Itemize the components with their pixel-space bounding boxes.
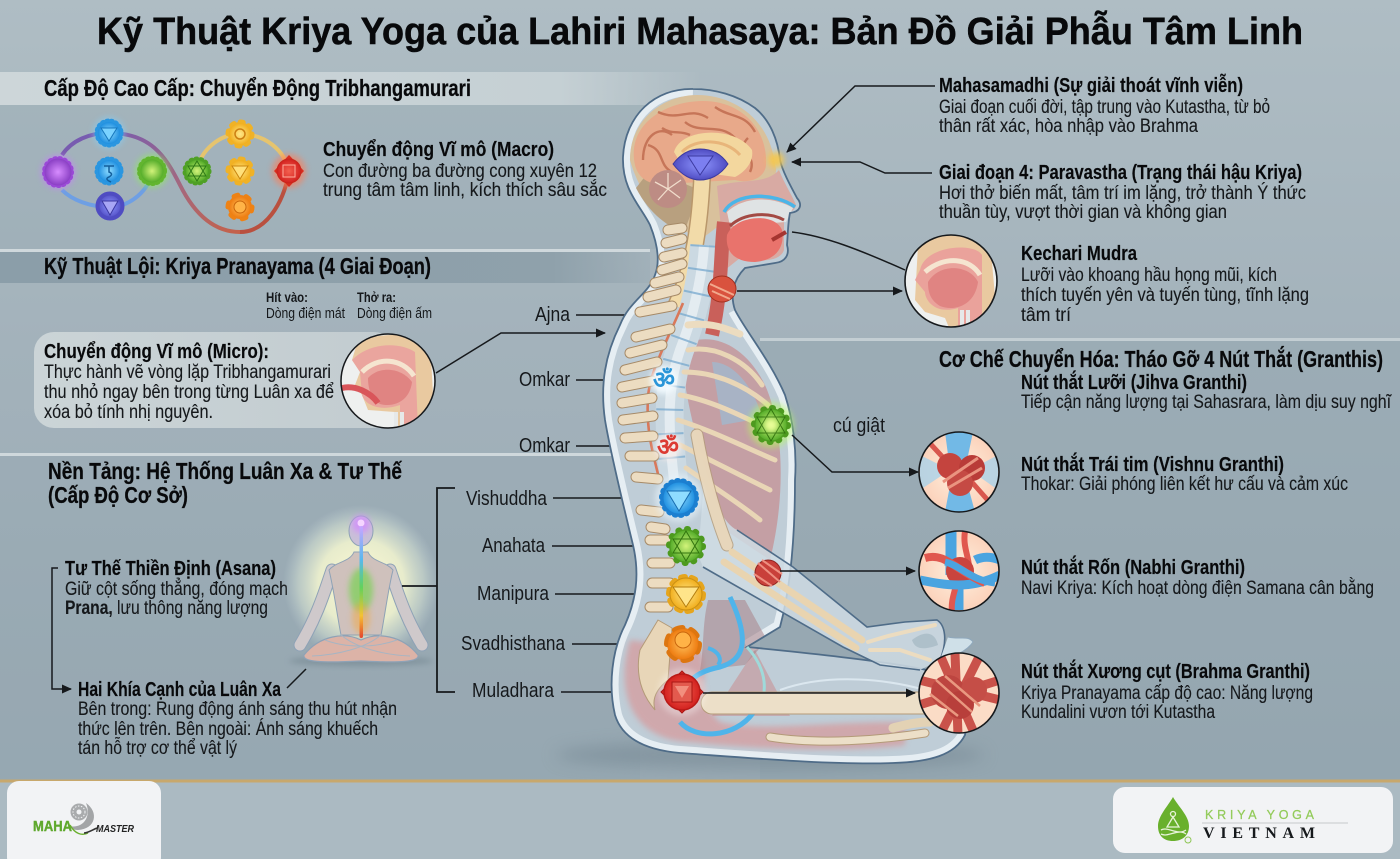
logo: Maha Master: MAHA [33,818,72,835]
text: kechari mudra: thích tuyến yên và tuyến tùng, tĩnh lặng [1021,285,1309,306]
panel: granthis [833,345,1392,735]
text: nabhi granthi: Nút thắt Rốn (Nabhi Granthi) [1021,555,1245,579]
arms [300,570,332,645]
chakra: Anahata upper green [748,402,794,448]
energy channels [680,597,925,734]
cerebellum [649,170,687,208]
arrow: to forehead mahasamadhi [787,86,935,152]
legend: inhale: Dòng điện mát [266,306,345,322]
throat [712,222,724,335]
ribs [678,349,775,520]
text: two aspects: Bên trong: Rung động ánh sáng thu hút nhận [78,699,397,720]
panel: advanced level [0,72,700,232]
throat knot [708,276,736,302]
heading: foundation: (Cấp Độ Cơ Sở) [48,482,188,508]
text: jihva granthi: Nút thắt Lưỡi (Jihva Granthi) [1021,370,1247,394]
line: lips to kechari inset [792,232,905,270]
chakra: Ajna [673,149,728,180]
chakra: Omkar blue: ॐ [653,366,675,394]
callout: micro movement [34,332,394,428]
arm [697,435,973,670]
label: jolt: cú giật [833,415,885,437]
logo: Kriya Yoga Vietnam [1113,787,1393,853]
label: Muladhara: Muladhara [472,680,555,702]
arrow: throat knot to kechari inset [737,290,902,292]
text: nabhi granthi [1021,555,1374,599]
logo: Kriya Yoga Vietnam: VIETNAM [1203,825,1315,842]
label: Omkar upper: Omkar [519,369,570,391]
text: two aspects: thức lên trên. Bên ngoài: Ánh sáng khuếch [78,719,378,740]
logo: Maha Master [7,781,161,859]
text: jihva granthi [1021,370,1392,413]
icon: nabhi knot [919,531,1000,612]
label: Svadhisthana: Svadhisthana [461,633,566,655]
icon: throat cross-section inset [341,334,435,432]
pineal glow [768,152,784,168]
panel: foundation [48,458,455,759]
text: mahasamadhi [939,73,1270,137]
abdomen column [700,600,767,670]
text: asana: Giữ cột sống thẳng, đóng mạch [65,578,288,600]
chakra: Omkar red: ॐ [657,433,679,461]
label: Vishuddha: Vishuddha [466,488,548,510]
chakra: Vishuddha [655,474,703,522]
sacrum [638,620,672,710]
panel: kriya pranayama [0,252,650,432]
legend: inhale: Hít vào: [266,290,308,305]
pelvis and leg muscle [625,640,905,749]
leg bones [712,703,930,741]
title: Kỹ Thuật Kriya Yoga của Lahiri Mahasaya: Bản Đồ Giải Phẫu Tâm Linh [97,9,1303,53]
vertebrae [622,228,682,607]
text: two aspects [78,678,397,759]
text: asana: Tư Thế Thiền Định (Asana) [65,557,276,580]
heading: advanced level: Cấp Độ Cao Cấp: Chuyển Động Tribhangamurari [44,75,471,101]
callout: micro movement: Chuyển động Vĩ mô (Micro): [44,340,269,363]
text: kechari mudra [1021,242,1309,326]
chest muscle [682,339,781,560]
collarbone [688,324,740,334]
text: paravastha: Hơi thở biến mất, tâm trí im lặng, trở thành Ý thức [939,183,1306,204]
logo: Maha Master: MASTER [96,824,135,835]
text: paravastha: Giai đoạn 4: Paravastha (Trạng thái hậu Kriya) [939,161,1302,184]
icon: kechari inset [905,235,998,330]
text: vishnu granthi [1021,452,1348,495]
callout: micro movement: xóa bỏ tính nhị nguyên. [44,402,213,423]
torso [329,552,393,635]
arrow: muladhara to inset [703,692,915,694]
legend: exhale: Dòng điện ấm [357,306,432,322]
text: mahasamadhi: thân rất xác, hòa nhập vào Brahma [939,116,1198,137]
callout: micro movement: Thực hành vẽ vòng lặp Tribhangamurari [44,362,331,383]
nasal cavity and face interior [717,170,796,270]
skull ring [630,95,776,240]
chakra: Svadhisthana [667,628,699,660]
spinal cord [676,178,702,306]
arrow: micro inset to body [436,333,605,373]
chakra labels [461,304,693,702]
text: brahma granthi [1021,659,1313,723]
text: macro movement: Con đường ba đường cong xuyên 12 [323,161,597,182]
label: Ajna: Ajna [535,304,571,326]
forearm knot [754,560,782,586]
arrow: to forehead paravastha [792,162,932,173]
bracket arrow: asana to chakra aspects [52,568,71,689]
inner glass rim [603,89,965,763]
text: two aspects: Hai Khía Cạnh của Luân Xa [78,678,281,701]
bracket: chakra list [402,488,455,692]
icon: brahma knot [919,653,1000,735]
text: macro movement: Chuyển động Vĩ mô (Macro) [323,138,554,161]
body outline [603,89,966,763]
chakra: Anahata [669,529,703,563]
chakra: Muladhara [658,668,706,716]
legend: inhale [266,290,345,322]
label: Omkar lower: Omkar [519,435,570,457]
heading: foundation [48,458,402,508]
anatomical body figure [555,89,985,769]
label: Anahata: Anahata [482,535,546,557]
mouth and tongue [724,196,795,262]
text: brahma granthi: Kundalini vươn tới Kutastha [1021,702,1215,723]
brain [634,101,784,208]
label: Omkar upper [519,369,652,391]
crossed legs [304,636,418,662]
callout: micro movement: thu nhỏ ngay bên trong từng Luân xa để [44,382,334,403]
text: brahma granthi: Kriya Pranayama cấp độ cao: Năng lượng [1021,683,1313,704]
icon: vishnu knot [919,432,999,512]
logo: Kriya Yoga Vietnam: KRIYA YOGA [1205,808,1315,822]
text: kechari mudra: Kechari Mudra [1021,242,1137,265]
label: Manipura: Manipura [477,583,550,605]
spine column [648,245,704,482]
text: kechari mudra: Lưỡi vào khoang hầu họng mũi, kích [1021,265,1277,286]
text: kechari mudra: tâm trí [1021,305,1072,326]
label: Omkar lower [519,435,657,457]
chakra path diagram [41,117,306,232]
heading: kriya pranayama: Kỹ Thuật Lội: Kriya Pranayama (4 Giai Đoạn) [44,253,431,279]
heading: foundation: Nền Tảng: Hệ Thống Luân Xa & Tư Thế [48,458,402,484]
text: macro movement [323,138,607,201]
text: asana [65,557,288,619]
icon: seated meditator [283,505,439,666]
legend: exhale [357,290,432,322]
text: paravastha [939,161,1306,223]
text: mahasamadhi: Mahasamadhi (Sự giải thoát vĩnh viễn) [939,73,1243,97]
footer [0,780,1400,859]
text: two aspects: tán hỗ trợ cơ thể vật lý [78,737,237,759]
chakra: Manipura [669,577,703,611]
text: mahasamadhi: Giai đoạn cuối đời, tập trung vào Kutastha, từ bỏ [939,97,1270,118]
arrow: forearm knot to inset [780,570,915,572]
text: paravastha: thuần tùy, vượt thời gian và không gian [939,202,1227,223]
head [349,516,373,546]
text: brahma granthi: Nút thắt Xương cụt (Brahma Granthi) [1021,659,1310,683]
text: macro movement: trung tâm tâm linh, kích thích sâu sắc [323,179,607,201]
text: vishnu granthi: Nút thắt Trái tim (Vishnu Granthi) [1021,452,1284,476]
legend: exhale: Thở ra: [357,290,396,305]
text: asana: Prana, lưu thông năng lượng [65,598,268,619]
arrow: heart chakra to vishnu granthi [792,435,918,472]
